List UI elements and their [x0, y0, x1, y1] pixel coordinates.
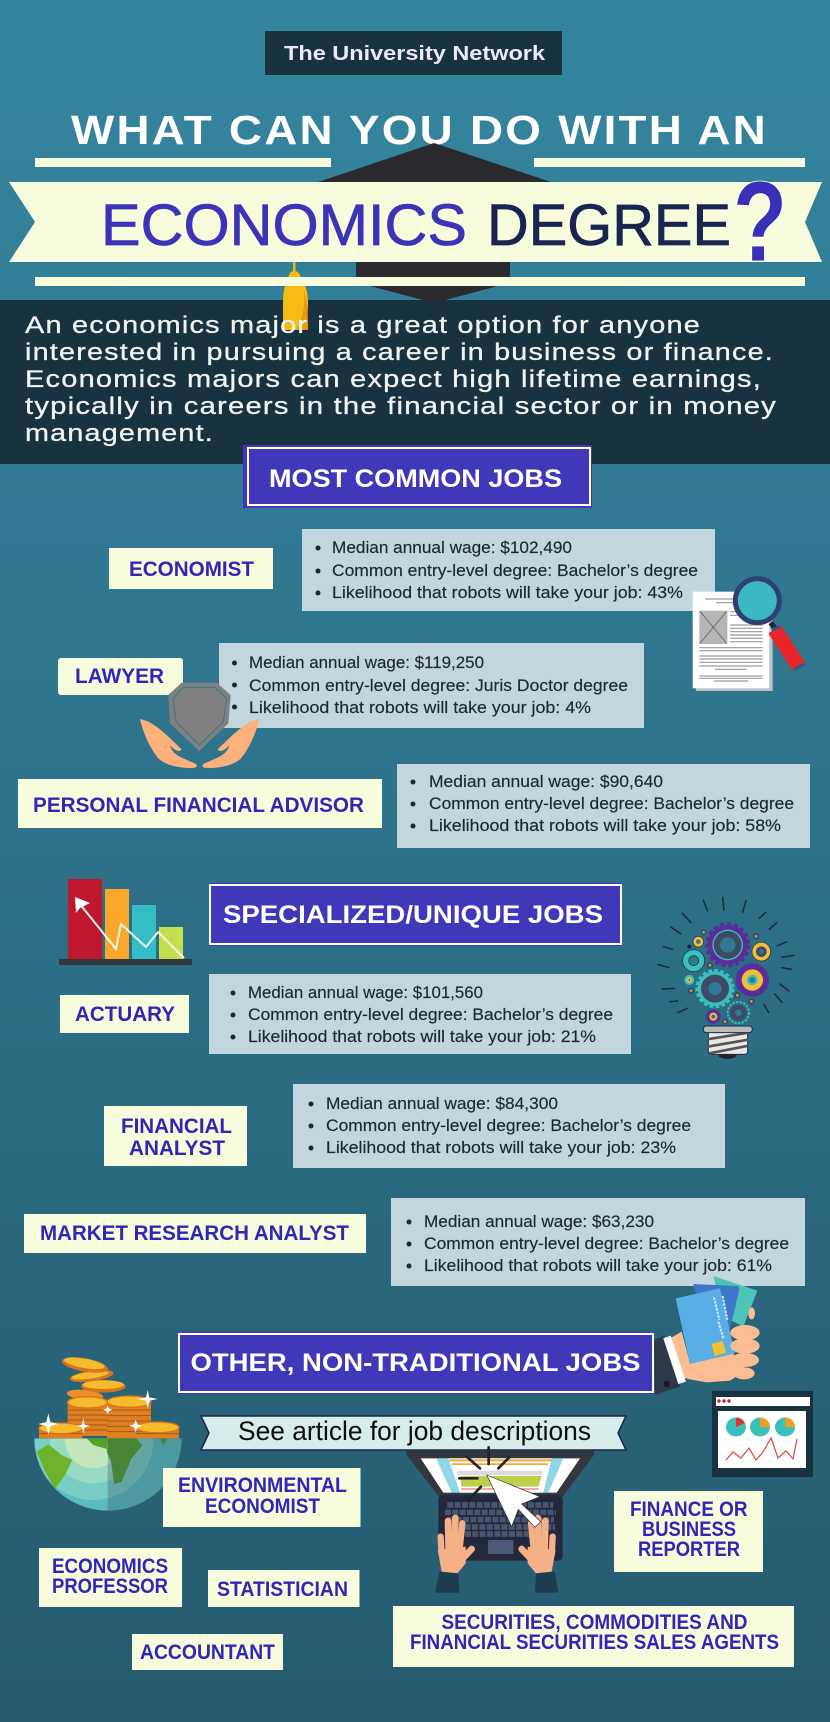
icon: globe with coins — [32, 1354, 188, 1515]
icon: laptop with hands and cursor — [406, 1447, 594, 1593]
info panel: actuary: Median annual wage: $101,560 — [248, 984, 483, 1002]
intro paragraph — [25, 312, 777, 447]
job label: finance or business reporter — [614, 1491, 763, 1572]
job label: finance or business reporter: REPORTER — [638, 1538, 740, 1561]
badge: The University Network — [265, 31, 562, 75]
job label: accountant: ACCOUNTANT — [140, 1641, 275, 1664]
badge: The University Network: The University Network — [284, 42, 546, 65]
intro paragraph: typically in careers in the financial sector or in money — [25, 393, 777, 420]
job label: economist — [109, 548, 273, 589]
icon: bar chart — [59, 879, 192, 965]
job label: environmental economist — [163, 1468, 360, 1527]
job label: environmental economist: ENVIRONMENTAL — [178, 1474, 347, 1497]
title line: WHAT CAN YOU DO WITH AN — [71, 107, 768, 153]
icon: graduation cap and ribbon banner — [9, 143, 822, 330]
section heading: specialized/unique jobs: SPECIALIZED/UNIQUE JOBS — [223, 901, 603, 929]
intro band background — [0, 300, 830, 464]
job label: personal financial advisor: PERSONAL FINANCIAL ADVISOR — [33, 794, 364, 817]
info panel: financial analyst: Median annual wage: $84,300 — [326, 1095, 558, 1113]
job label: statistician — [208, 1570, 360, 1607]
job label: actuary — [60, 995, 189, 1033]
section heading: most common jobs — [243, 445, 592, 508]
heading: economics degree: DEGREE — [487, 193, 731, 258]
job label: lawyer: LAWYER — [75, 665, 164, 688]
ribbon — [9, 182, 822, 262]
ribbon: see article for job descriptions: See article for job descriptions — [238, 1416, 591, 1446]
info panel: market research analyst: Likelihood that robots will take your job: 61% — [424, 1257, 772, 1275]
heading: economics degree — [101, 158, 787, 285]
job label: market research analyst: MARKET RESEARCH ANALYST — [40, 1222, 349, 1245]
info panel: market research analyst: Median annual wage: $63,230 — [424, 1213, 654, 1231]
info panel: economist — [302, 529, 715, 611]
job label: statistician: STATISTICIAN — [217, 1578, 348, 1601]
job label: financial analyst: ANALYST — [129, 1137, 225, 1160]
icon: dashboard window — [712, 1391, 813, 1477]
job label: accountant — [132, 1634, 283, 1670]
info panel: economist: Likelihood that robots will take your job: 43% — [332, 584, 683, 602]
info panel: economist: Common entry-level degree: Bachelor’s degree — [332, 562, 698, 580]
intro paragraph: management. — [25, 420, 214, 447]
intro paragraph: interested in pursuing a career in business or finance. — [25, 339, 774, 366]
heading: economics degree: ? — [733, 158, 787, 285]
job label: finance or business reporter: FINANCE OR — [630, 1498, 748, 1521]
graduation cap — [318, 143, 551, 303]
job label: economics professor: PROFESSOR — [52, 1575, 168, 1598]
decorative rules — [35, 158, 805, 286]
job label: securities, commodities and financial securities sales agents — [393, 1606, 794, 1667]
heading: economics degree: ECONOMICS — [101, 193, 467, 258]
job label: economics professor: ECONOMICS — [52, 1555, 168, 1578]
section heading: other, non-traditional jobs: OTHER, NON-TRADITIONAL JOBS — [190, 1349, 640, 1377]
info panel: financial analyst: Likelihood that robots will take your job: 23% — [326, 1139, 676, 1157]
info panel: actuary: Likelihood that robots will take your job: 21% — [248, 1028, 596, 1046]
section heading: most common jobs: MOST COMMON JOBS — [269, 465, 562, 493]
info panel: personal financial advisor — [397, 764, 810, 848]
job label: securities, commodities and financial securities sales agents: SECURITIES, COMMODITIES AND — [442, 1611, 748, 1634]
intro paragraph: An economics major is a great option for anyone — [25, 312, 701, 339]
info panel: financial analyst: Common entry-level degree: Bachelor’s degree — [326, 1117, 691, 1135]
info panel: personal financial advisor: Common entry-level degree: Bachelor’s degree — [429, 795, 794, 813]
job label: lawyer — [58, 658, 183, 695]
job label: economist: ECONOMIST — [129, 558, 254, 581]
info panel: market research analyst — [391, 1198, 805, 1286]
job label: financial analyst — [104, 1106, 247, 1166]
info panel: lawyer: Likelihood that robots will take your job: 4% — [249, 699, 591, 717]
section heading: specialized/unique jobs — [209, 883, 622, 946]
info panel: actuary — [209, 974, 631, 1054]
job label: market research analyst — [24, 1214, 366, 1253]
icon: gear light bulb — [658, 897, 794, 1059]
job label: economics professor — [39, 1548, 182, 1607]
section heading: other, non-traditional jobs — [178, 1332, 654, 1394]
info panel: economist: Median annual wage: $102,490 — [332, 539, 572, 557]
info panel: personal financial advisor: Median annual wage: $90,640 — [429, 773, 663, 791]
job label: securities, commodities and financial securities sales agents: FINANCIAL SECURITIES SALES AGENTS — [410, 1631, 779, 1654]
icon: document and magnifier — [693, 579, 805, 691]
icon: hand holding credit cards — [654, 1276, 760, 1395]
tassel — [283, 262, 308, 330]
info panel: actuary: Common entry-level degree: Bachelor’s degree — [248, 1006, 613, 1024]
info panel: lawyer — [219, 643, 644, 728]
info panel: market research analyst: Common entry-level degree: Bachelor’s degree — [424, 1235, 789, 1253]
info panel: lawyer: Common entry-level degree: Juris Doctor degree — [249, 677, 628, 695]
job label: finance or business reporter: BUSINESS — [642, 1518, 736, 1541]
intro paragraph: Economics majors can expect high lifetime earnings, — [25, 366, 762, 393]
job label: actuary: ACTUARY — [75, 1003, 175, 1026]
job label: personal financial advisor — [18, 779, 382, 828]
job label: environmental economist: ECONOMIST — [205, 1495, 320, 1518]
icon: shield in hands — [140, 683, 259, 768]
info panel: personal financial advisor: Likelihood that robots will take your job: 58% — [429, 817, 781, 835]
job label: financial analyst: FINANCIAL — [121, 1115, 232, 1138]
info panel: lawyer: Median annual wage: $119,250 — [249, 654, 484, 672]
info panel: financial analyst — [293, 1084, 725, 1168]
